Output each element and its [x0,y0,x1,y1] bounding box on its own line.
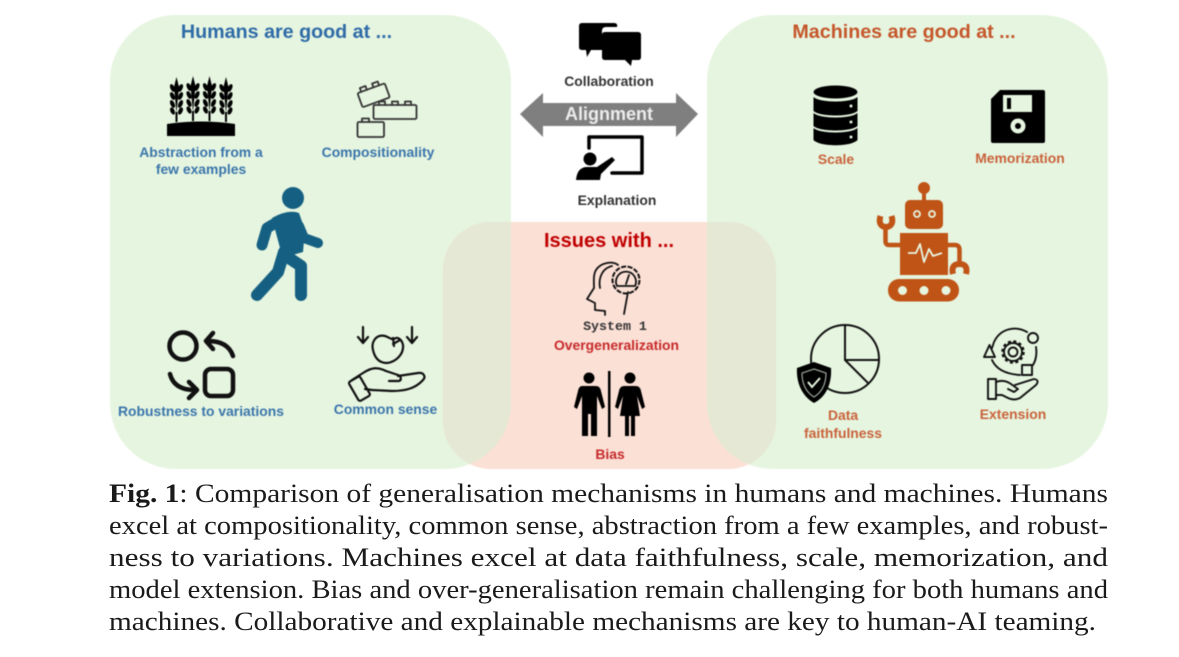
label: data faithfulness: faithfulness [804,425,882,441]
icon: man and woman divided [574,371,645,437]
caption: excel at compositionality, common sense, abstraction from a few examples, and robust- [109,510,1108,540]
caption: Fig. 1 : Comparison of generalisation mechanisms in humans and machines. Humans [109,478,1108,508]
caption: model extension. Bias and over-generalisation remain challenging for both humans and [109,574,1108,604]
icon: collaboration speech bubbles [579,23,641,66]
arrow: alignment: Alignment [565,104,653,124]
label: bias: Bias [595,446,625,462]
arrow: alignment [520,93,698,137]
label: overgeneralization: Overgeneralization [554,337,679,353]
heading: issues: Issues with ... [544,230,674,252]
label: common sense: Common sense [334,401,437,417]
label: memorization: Memorization [975,150,1065,166]
panel: humans background [110,15,511,469]
icon: robot [880,182,967,302]
label: abstraction: Abstraction from a [139,144,263,160]
caption: machines. Collaborative and explainable mechanisms are key to human-AI teaming. [109,606,1096,636]
icon: floppy disk [991,90,1045,143]
panel overlap: machines and issues [707,222,776,464]
label: system 1: System 1 [583,319,647,334]
icon: explanation presenter [576,137,642,180]
diagram [110,15,1108,469]
panel overlap: humans and issues [443,222,511,464]
label: collaboration: Collaboration [564,73,654,89]
icon: robustness shapes [170,332,233,398]
label: compositionality: Compositionality [322,144,435,160]
icon: database [814,86,858,145]
heading: machines: Machines are good at ... [792,21,1016,43]
label: scale: Scale [818,151,854,167]
label: data faithfulness: Data [828,407,858,423]
panel: machines background [707,15,1108,469]
caption: ness to variations. Machines excel at data faithfulness, scale, memorization, and [109,542,1108,572]
label: robustness: Robustness to variations [118,403,284,419]
icon: pie chart with shield [797,325,879,403]
label: extension: Extension [980,406,1046,422]
icon: head with gauge [587,263,640,315]
label: abstraction: few examples [156,161,246,177]
icon: building blocks [356,80,416,137]
icon: apple in hand [348,327,424,402]
caption [109,478,1108,636]
icon: wheat [167,76,235,136]
icon: walking person [257,187,318,295]
panel: issues background [443,222,776,469]
icon: extension gear and hand [984,329,1038,400]
heading: humans: Humans are good at ... [181,21,392,43]
label: explanation: Explanation [578,192,656,208]
